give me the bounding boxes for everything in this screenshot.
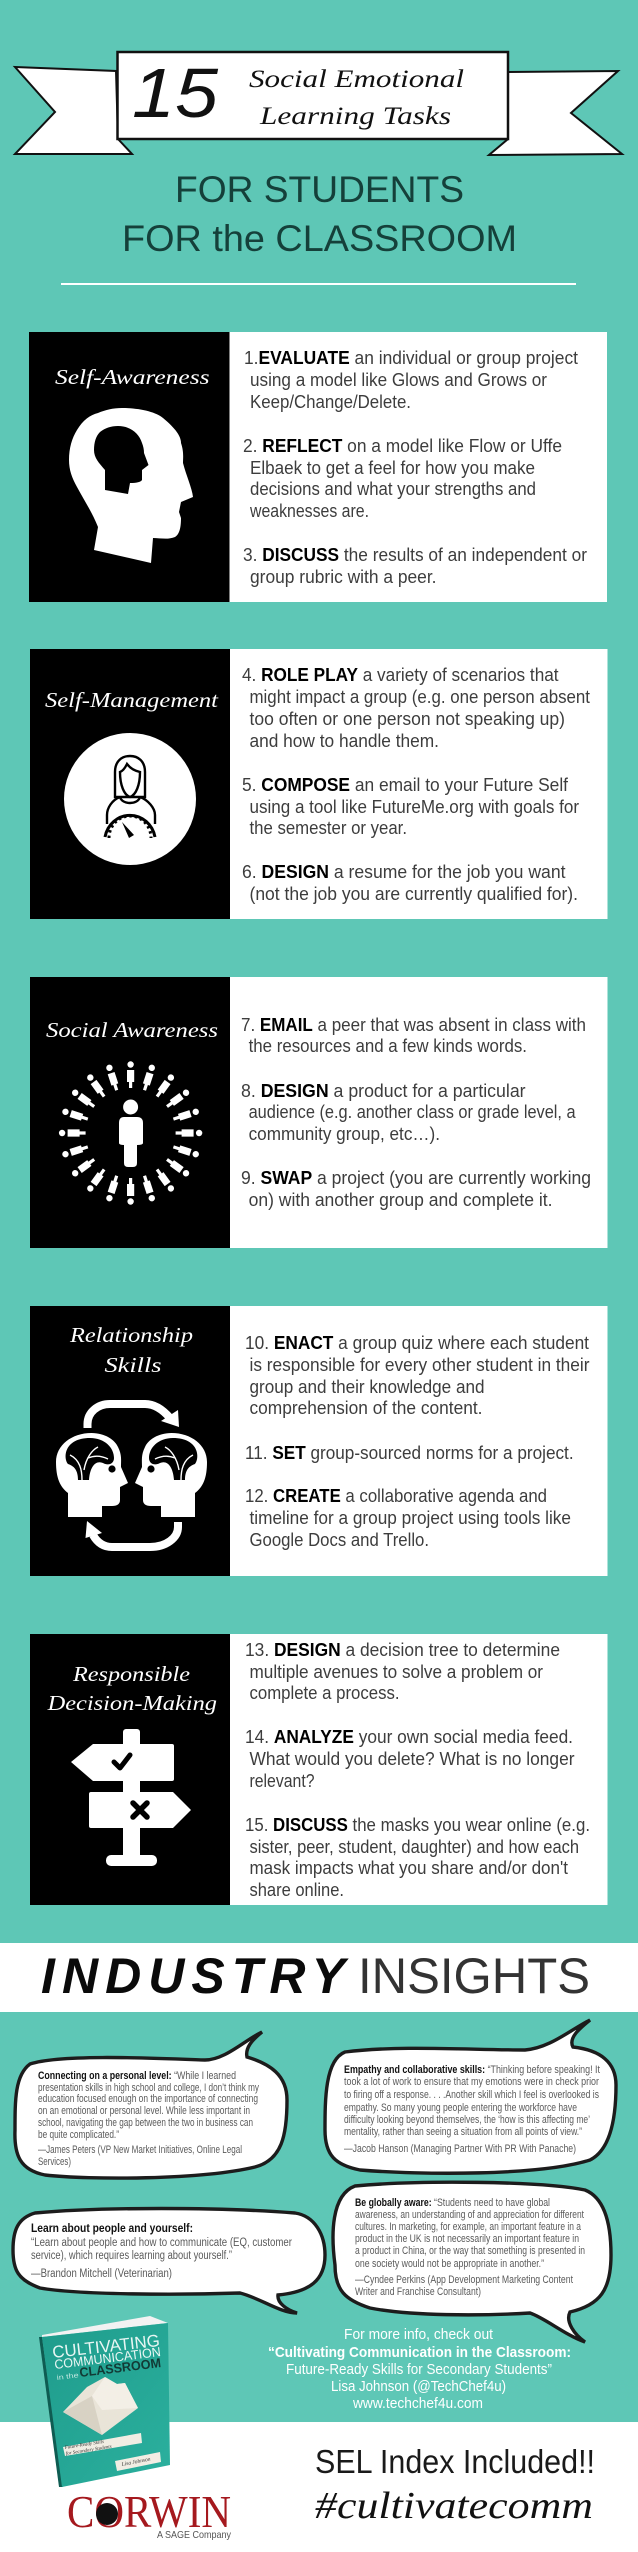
publisher logo: Corwin: A SAGE Company <box>157 2529 232 2541</box>
banner right tail <box>489 71 622 155</box>
panel text: tasks 1-3: using a model like Glows and Grows or <box>250 369 547 390</box>
panel text: tasks 4-6: the semester or year. <box>250 817 407 838</box>
publisher logo: Corwin: CORWIN <box>67 2486 231 2537</box>
speech bubble: empathy and collaborative skills <box>325 2020 616 2173</box>
panel background <box>30 977 608 1248</box>
panel text: tasks 4-6 <box>242 664 590 904</box>
panel text: tasks 4-6: and how to handle them. <box>250 730 439 751</box>
panel text: tasks 13-15: multiple avenues to solve a problem or <box>250 1661 543 1682</box>
speech bubble: connecting on a personal level: presentation skills in high school and college, I don’t think my <box>38 2082 260 2094</box>
panel: self-management <box>30 649 608 919</box>
more info text <box>268 2326 571 2412</box>
subtitle: FOR the CLASSROOM <box>122 218 517 259</box>
panel text: tasks 1-3: 1.EVALUATE an individual or group project <box>244 347 578 368</box>
book cover: CULTIVATING <box>51 2331 161 2362</box>
more info text: www.techchef4u.com <box>352 2395 483 2412</box>
heading band: industry insights <box>0 1943 638 2012</box>
speech bubble: empathy and collaborative skills: Empathy and collaborative skills: “Thinking before speaking! It <box>344 2064 600 2076</box>
speech bubble: be globally aware: —Cyndee Perkins (App Development Marketing Content <box>355 2274 573 2286</box>
panel text: tasks 13-15 <box>245 1639 590 1900</box>
speech bubble: connecting on a personal level: on an emotional or personal level. While less important in <box>38 2105 250 2117</box>
more info text: Lisa Johnson (@TechChef4u) <box>331 2378 506 2395</box>
panel text: tasks 1-3: 2. REFLECT on a model like Flow or Uffe <box>243 435 562 456</box>
panel text: tasks 4-6: using a tool like FutureMe.org with goals for <box>250 796 579 817</box>
book cover: COMMUNICATION <box>54 2344 162 2372</box>
hashtag: #cultivatecomm <box>315 2485 593 2527</box>
panel background <box>30 1306 608 1576</box>
panel text: tasks 4-6: (not the job you are currently qualified for). <box>250 883 578 904</box>
banner text <box>249 66 464 130</box>
panel text: tasks 7-9: on) with another group and complete it. <box>249 1189 552 1210</box>
book cover <box>39 2316 170 2487</box>
panel heading <box>46 1662 217 1715</box>
panel background <box>29 332 607 602</box>
speech bubble: be globally aware <box>333 2182 611 2342</box>
panel text: tasks 1-3 <box>243 347 587 587</box>
panel heading: Responsible <box>72 1662 190 1686</box>
panel text: tasks 4-6: might impact a group (e.g. one person absent <box>250 686 590 707</box>
panel text: tasks 7-9: 9. SWAP a project (you are currently working <box>241 1167 591 1188</box>
book cover: Future-Ready Skills <box>64 2440 105 2451</box>
panel: relationship skills <box>30 1306 608 1576</box>
panel text: tasks 7-9: community group, etc…). <box>249 1123 440 1144</box>
speech bubble: connecting on a personal level: Services) <box>38 2156 71 2168</box>
icon: head within head <box>69 408 193 563</box>
panel text: tasks 10-12: 10. ENACT a group quiz where each student <box>245 1332 589 1353</box>
panel text: tasks 10-12: 11. SET group-sourced norms for a project. <box>245 1442 574 1463</box>
panel text: tasks 4-6: 6. DESIGN a resume for the job you want <box>242 861 566 882</box>
panel text: tasks 1-3: Keep/Change/Delete. <box>250 391 411 412</box>
panel text: tasks 4-6: too often or one person not speaking up) <box>250 708 565 729</box>
panel text: tasks 10-12: 12. CREATE a collaborative agenda and <box>245 1485 547 1506</box>
speech bubble: be globally aware: a product in China, or the way that something is presented in <box>355 2245 585 2257</box>
footer white band <box>0 2422 638 2552</box>
speech bubble: learn about people and yourself: Learn about people and yourself: <box>31 2223 193 2235</box>
icon: signpost with check and cross <box>71 1729 191 1866</box>
panel text: tasks 7-9: 8. DESIGN a product for a particular <box>241 1080 526 1101</box>
banner number: 15 <box>132 54 219 132</box>
speech bubble: empathy and collaborative skills: mentality, rather than seeing a situation from all points of view.” <box>344 2126 582 2138</box>
panel text: tasks 13-15: What would you delete? What is no longer <box>250 1748 574 1769</box>
panel heading <box>69 1323 193 1377</box>
speech bubble: be globally aware: product in the UK is not necessarily an important feature in <box>355 2233 579 2245</box>
panel: self-awareness <box>29 332 607 602</box>
speech bubble: be globally aware: cultures. In marketing, for example, an important feature in a <box>355 2221 581 2233</box>
speech bubble: connecting on a personal level <box>15 2032 287 2178</box>
more info text: “Cultivating Communication in the Classroom: <box>268 2344 571 2361</box>
panel text: tasks 1-3: 3. DISCUSS the results of an independent or <box>243 544 587 565</box>
book cover: CLASSROOM <box>79 2355 162 2380</box>
speech bubble: learn about people and yourself <box>13 2208 325 2313</box>
heading band: industry insights: INDUSTRY <box>41 1948 350 2004</box>
panel text: tasks 13-15: complete a process. <box>250 1682 400 1703</box>
speech bubble: connecting on a personal level: school, navigating the gap between the two in business can <box>38 2117 253 2129</box>
icon: two heads exchanging thoughts <box>56 1404 207 1547</box>
book cover: in the <box>56 2372 79 2382</box>
panel text: tasks 10-12: group and their knowledge and <box>250 1376 484 1397</box>
panel text: tasks 1-3: decisions and what your strengths and <box>250 478 536 499</box>
banner left tail <box>15 67 132 154</box>
panel text: tasks 7-9: 7. EMAIL a peer that was absent in class with <box>241 1014 586 1035</box>
icon: person surrounded by a crowd <box>59 1061 202 1205</box>
speech bubble: learn about people and yourself: “Learn about people and how to communicate (EQ, customer <box>31 2237 292 2249</box>
panel text: tasks 4-6: 4. ROLE PLAY a variety of scenarios that <box>242 664 559 685</box>
panel text: tasks 4-6: 5. COMPOSE an email to your Future Self <box>242 774 569 795</box>
panel background <box>30 1634 608 1905</box>
book cover: Lisa Johnson <box>120 2456 151 2468</box>
panel text: tasks 13-15: 14. ANALYZE your own social media feed. <box>245 1726 573 1747</box>
panel text: tasks 1-3: weaknesses are. <box>249 500 369 521</box>
panel text: tasks 10-12: timeline for a group project using tools like <box>250 1507 571 1528</box>
panel heading: Relationship <box>69 1323 193 1347</box>
panel background <box>30 649 608 919</box>
speech bubble: connecting on a personal level: —James Peters (VP New Market Initiatives, Online Legal <box>38 2144 242 2156</box>
panel text: tasks 10-12: comprehension of the content. <box>250 1397 482 1418</box>
panel heading: Skills <box>104 1353 162 1377</box>
speech bubble: empathy and collaborative skills: took a lot of work to ensure that my emotions were in check prior <box>344 2076 599 2088</box>
speech bubble: connecting on a personal level: education focused enough on the importance of connecting <box>38 2093 258 2105</box>
speech bubble: empathy and collaborative skills: —Jacob Hanson (Managing Partner With PR With Panache) <box>344 2143 576 2155</box>
more info text: Future-Ready Skills for Secondary Students” <box>286 2361 552 2378</box>
heading band: industry insights: INSIGHTS <box>358 1948 590 2004</box>
panel text: tasks 13-15: share online. <box>250 1879 344 1900</box>
panel text: tasks 10-12 <box>245 1332 590 1550</box>
panel text: tasks 7-9 <box>241 1014 591 1210</box>
panel text: tasks 1-3: group rubric with a peer. <box>250 566 436 587</box>
speech bubble: learn about people and yourself: service), which requires learning about yourself.” <box>31 2250 232 2262</box>
panel heading: Self-Management <box>45 688 219 712</box>
panel text: tasks 10-12: is responsible for every other student in their <box>250 1354 590 1375</box>
panel text: tasks 7-9: audience (e.g. another class or grade level, a <box>249 1101 576 1122</box>
panel: social awareness <box>30 977 608 1248</box>
banner text: Learning Tasks <box>259 103 451 130</box>
panel text: tasks 13-15: sister, peer, student, daughter) and how each <box>250 1836 579 1857</box>
panel text: tasks 1-3: Elbaek to get a feel for how you make <box>250 457 535 478</box>
speech bubble: connecting on a personal level: Connecting on a personal level: “While I learned <box>38 2070 236 2082</box>
title banner <box>15 52 622 155</box>
panel text: tasks 7-9: the resources and a few kinds words. <box>249 1035 527 1056</box>
banner main ribbon <box>118 52 508 139</box>
speech bubble: be globally aware: Be globally aware: “Students need to have global <box>355 2197 550 2209</box>
speech bubble: be globally aware: awareness, an understanding of and appreciation for different <box>355 2209 584 2221</box>
panel heading: Social Awareness <box>46 1018 218 1042</box>
speech bubble: empathy and collaborative skills: empathy. So many young people entering the workforce have <box>344 2102 577 2114</box>
speech bubble: connecting on a personal level: be quite complicated.” <box>38 2129 119 2141</box>
panel text: tasks 10-12: Google Docs and Trello. <box>250 1529 429 1550</box>
panel text: tasks 13-15: 15. DISCUSS the masks you wear online (e.g. <box>245 1814 590 1835</box>
icon: woman with gauge <box>64 733 196 865</box>
speech bubble: be globally aware: one society would not be appropriate in another.” <box>355 2258 544 2270</box>
speech bubble: learn about people and yourself: —Brandon Mitchell (Veterinarian) <box>31 2268 172 2280</box>
panel text: tasks 13-15: mask impacts what you share and/or don't <box>250 1857 568 1878</box>
more info text: For more info, check out <box>344 2326 494 2343</box>
subtitle <box>122 169 517 259</box>
SEL index note: SEL Index Included!! <box>315 2443 595 2480</box>
subtitle: FOR STUDENTS <box>175 169 464 210</box>
panel heading: Self-Awareness <box>55 365 210 389</box>
speech bubble: be globally aware: Writer and Franchise Consultant) <box>355 2286 481 2298</box>
panel heading: Decision-Making <box>46 1691 217 1715</box>
banner text: Social Emotional <box>249 66 464 93</box>
panel: responsible decision-making <box>30 1634 608 1905</box>
panel text: tasks 13-15: 13. DESIGN a decision tree to determine <box>245 1639 560 1660</box>
book cover: for Secondary Students <box>66 2445 112 2457</box>
panel text: tasks 13-15: relevant? <box>250 1770 314 1791</box>
